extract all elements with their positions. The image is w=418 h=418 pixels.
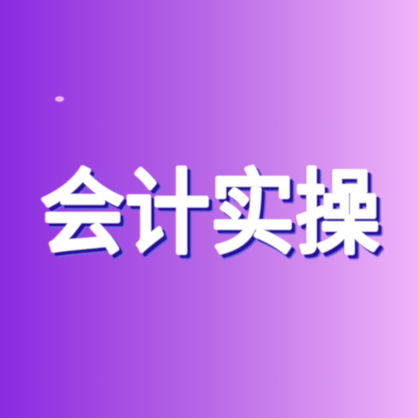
title: 会计实操 [44,142,384,276]
title: 会计实操 [39,139,379,272]
title: 会计实操 [44,144,384,276]
title: 会计实操 [40,139,380,272]
icon: small pink dot [55,96,64,102]
